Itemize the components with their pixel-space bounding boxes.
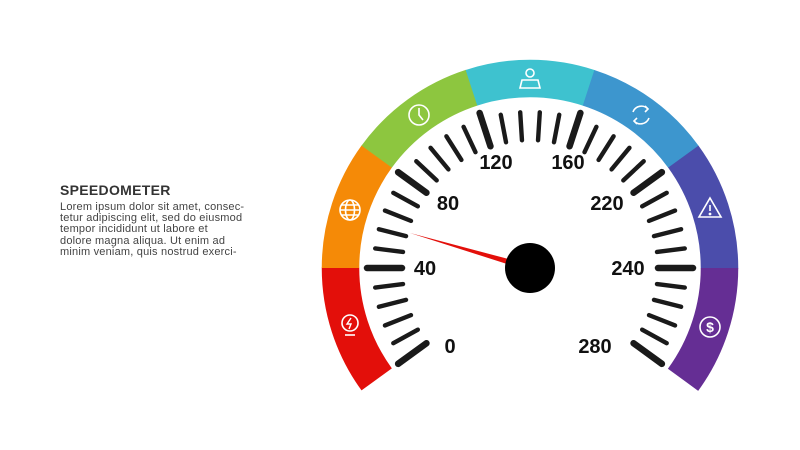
text block: minim veniam, quis nostrud exerci- (60, 246, 237, 258)
speed labels: 160 (551, 152, 585, 174)
tick marks (367, 112, 693, 364)
colored band (265, 3, 795, 450)
icon: warning (699, 198, 721, 217)
icon: clock (409, 105, 429, 125)
speed labels: 280 (578, 336, 612, 358)
speed labels: 80 (437, 193, 459, 215)
icon: lightbulb (342, 315, 358, 335)
speed labels: 0 (444, 336, 456, 358)
hub (505, 243, 555, 293)
speed labels: 120 (479, 152, 513, 174)
title: SPEEDOMETER (60, 182, 171, 198)
text block: tempor incididunt ut labore et (60, 223, 208, 235)
icon: user (520, 69, 540, 88)
speed labels: 220 (590, 193, 624, 215)
icon: dollar (700, 317, 720, 337)
text block: dolore magna aliqua. Ut enim ad (60, 235, 225, 247)
text block: Lorem ipsum dolor sit amet, consec- (60, 201, 244, 213)
speed labels: 40 (414, 258, 436, 280)
speed labels: 240 (611, 258, 645, 280)
text block (60, 201, 244, 258)
icon: globe (340, 200, 360, 220)
icon: refresh (633, 106, 649, 124)
text block: tetur adipiscing elit, sed do eiusmod (60, 212, 242, 224)
icon: dollar: $ (706, 319, 714, 335)
needle (410, 233, 531, 271)
speed labels (414, 152, 645, 358)
